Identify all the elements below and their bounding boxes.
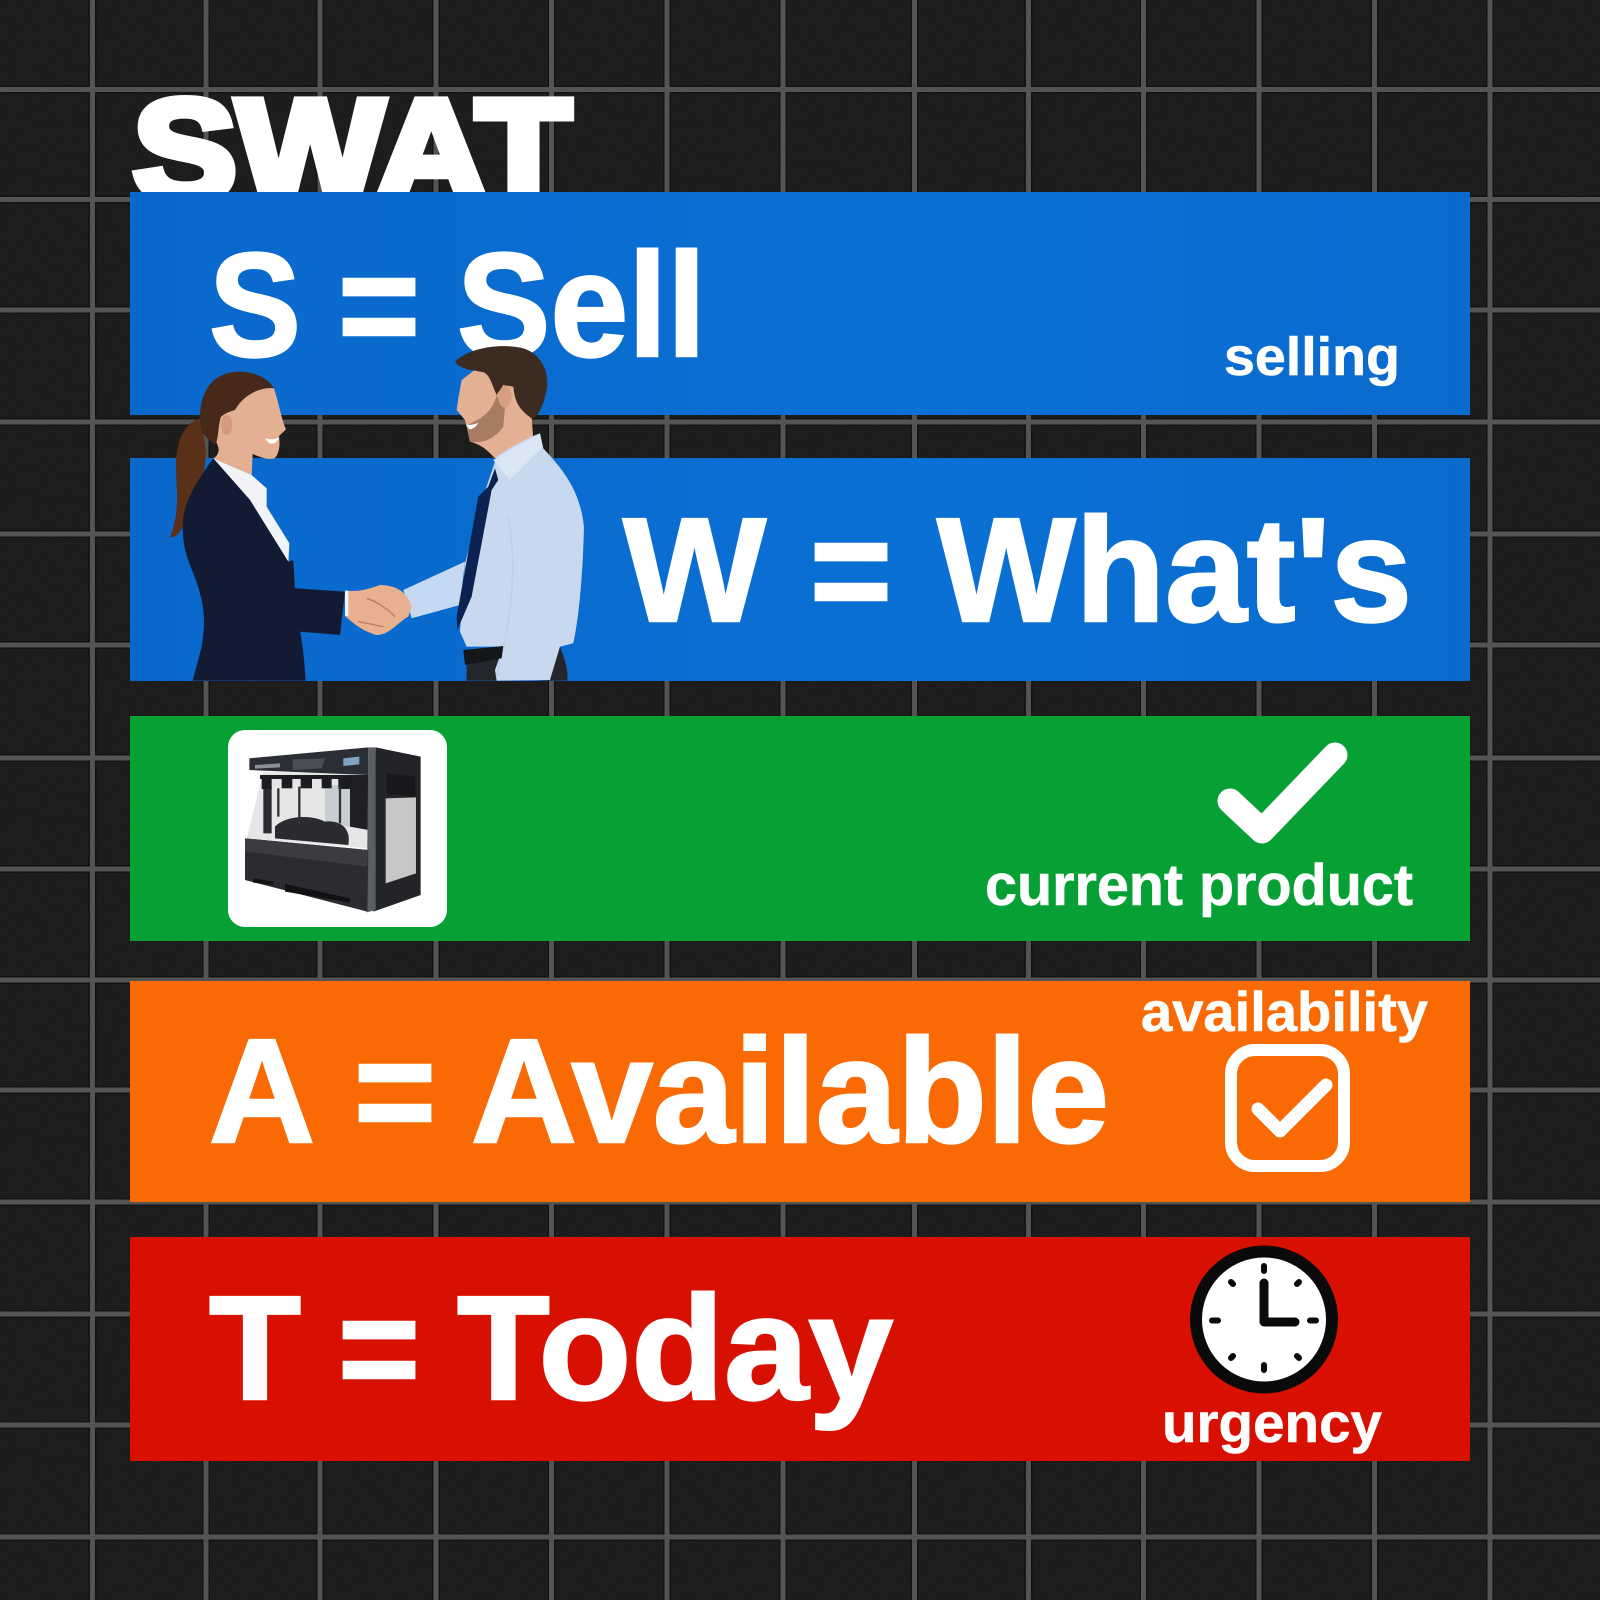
man [403, 346, 584, 681]
panel: W = What's [130, 458, 1470, 681]
heading: T = Today [209, 1266, 893, 1431]
heading: T = Today: Today [457, 1266, 893, 1431]
panel: A = Available [130, 980, 1470, 1202]
label: current product: current product [985, 853, 1413, 918]
woman [170, 372, 345, 681]
heading: S = Sell [209, 223, 706, 388]
heading: A = Available: A [209, 1009, 315, 1174]
heading: W = What's: = [810, 488, 892, 653]
icon: checkbox [1231, 1050, 1344, 1166]
illustration: two people shaking hands [170, 346, 584, 681]
panel: S = Sell [130, 192, 1470, 415]
icon: product machine tile [228, 730, 447, 927]
panel: T = Today [130, 1237, 1470, 1461]
handshake [345, 585, 412, 635]
title: SWAT [133, 70, 571, 231]
heading: W = What's: What's [937, 488, 1412, 653]
icon: clock [1196, 1252, 1332, 1388]
heading: S = Sell: Sell [457, 223, 706, 388]
heading: T = Today: = [338, 1266, 420, 1431]
heading: S = Sell: = [338, 223, 420, 388]
heading: A = Available: = [354, 1009, 436, 1174]
heading: T = Today: T [209, 1266, 301, 1431]
heading: W = What's: W [623, 488, 766, 653]
icon: check mark [1230, 755, 1335, 831]
panel: current product [130, 716, 1470, 941]
heading: W = What's [623, 488, 1412, 653]
label: urgency: urgency [1162, 1391, 1382, 1454]
heading: A = Available: Available [471, 1009, 1109, 1174]
heading: S = Sell: S [209, 223, 301, 388]
label: availability: availability [1141, 980, 1428, 1043]
label: selling: selling [1224, 327, 1400, 387]
